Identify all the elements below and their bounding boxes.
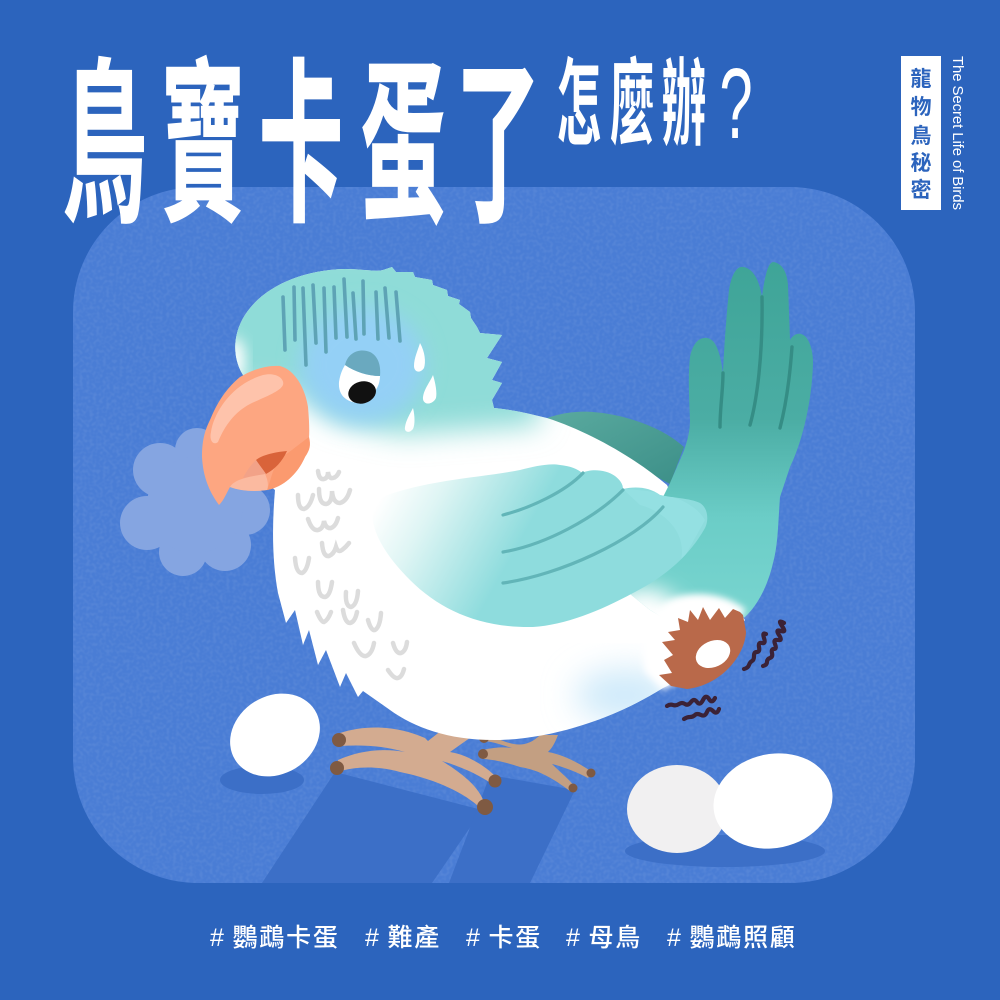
vent with spiky brown rim xyxy=(643,594,746,690)
hashtags: # 卡蛋 xyxy=(466,924,542,952)
series tag text: 密 xyxy=(910,178,932,202)
title secondary: 怎 xyxy=(557,51,601,157)
series tag text: 秘 xyxy=(910,152,932,175)
hashtags: # 難產 xyxy=(365,924,441,952)
eye xyxy=(339,351,380,407)
series tag text: 物 xyxy=(910,96,932,119)
strain squiggles xyxy=(667,622,784,719)
wing xyxy=(376,464,708,627)
series tag text xyxy=(910,68,932,202)
title main: 寶 xyxy=(161,49,245,245)
mouth inner xyxy=(243,460,266,478)
series tag text: 龍 xyxy=(910,68,932,91)
title secondary xyxy=(557,48,753,160)
english vertical caption: The Secret Life of Birds xyxy=(949,56,966,210)
sweat drops xyxy=(405,343,436,432)
title main: 蛋 xyxy=(361,49,445,245)
foot and egg shadows xyxy=(220,766,825,883)
title secondary: 辦 xyxy=(662,51,706,157)
back plumage xyxy=(547,412,684,484)
open mouth xyxy=(256,451,287,474)
tail xyxy=(630,262,813,618)
body and head xyxy=(210,240,745,740)
crown feather lines xyxy=(283,279,400,365)
chest feather marks xyxy=(295,471,407,678)
front foot xyxy=(330,728,502,815)
title secondary: 麼 xyxy=(610,51,654,157)
beak xyxy=(202,366,310,505)
title main: 了 xyxy=(456,49,540,245)
egg right front xyxy=(705,743,841,859)
panel: rounded illustration backdrop xyxy=(73,187,915,883)
hashtags: # 鸚鵡卡蛋 xyxy=(210,924,340,952)
lower beak xyxy=(230,474,268,491)
wing feather lines xyxy=(503,473,663,583)
illustration: parrot xyxy=(202,240,820,815)
title secondary: ? xyxy=(719,48,753,160)
title main: 卡 xyxy=(259,49,343,245)
hashtags xyxy=(210,924,797,952)
head and belly colour washes xyxy=(210,240,675,721)
series tag xyxy=(901,56,941,210)
beak highlight xyxy=(210,374,283,443)
series tag text: 鳥 xyxy=(910,125,932,148)
breath cloud xyxy=(120,428,270,576)
egg left xyxy=(214,677,336,793)
hashtags: # 鸚鵡照顧 xyxy=(667,924,797,952)
title main: 鳥 xyxy=(63,49,147,245)
egg right back xyxy=(627,765,727,853)
front foot claws xyxy=(330,733,502,815)
tail feather lines xyxy=(720,297,792,428)
beak shade xyxy=(267,437,310,490)
title main xyxy=(63,49,540,245)
back foot xyxy=(478,733,596,792)
back foot claws xyxy=(478,733,596,792)
hashtags: # 母鳥 xyxy=(566,924,642,952)
eggs xyxy=(214,677,841,859)
